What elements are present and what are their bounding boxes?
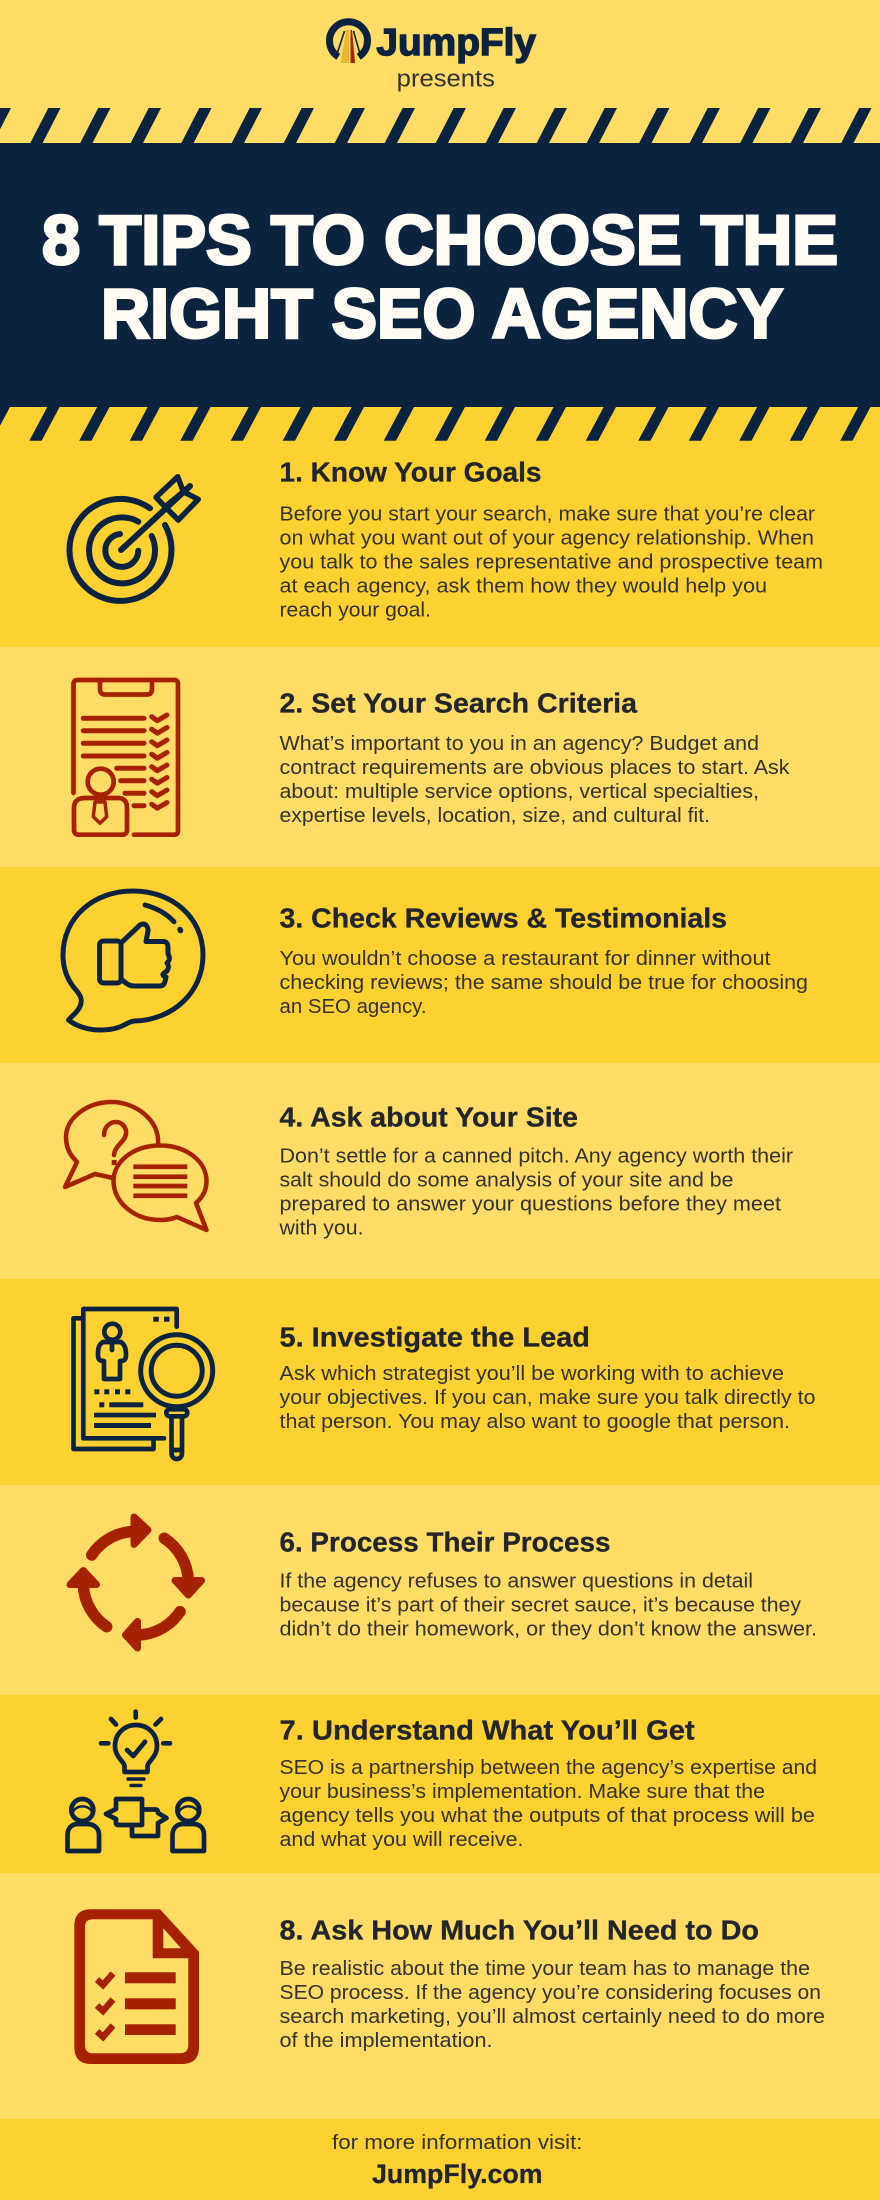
body text: tip 5: that person. You may also want to google that person. [280,1411,790,1433]
body text: tip 8: of the implementation. [280,2030,492,2052]
panel: tip 7 [0,1695,880,1873]
footer website: JumpFly.com [372,2159,543,2189]
panel: tip 8 [0,1873,880,2119]
body text: tip 7 [280,1757,817,1851]
body text: tip 3: an SEO agency. [280,996,426,1018]
lower hazard stripes [0,407,870,441]
body text: tip 7: your business’s implementation. Make sure that the [280,1781,765,1803]
body text: tip 1 [280,504,823,622]
body text: tip 5: your objectives. If you can, make sure you talk directly to [280,1387,816,1409]
body text: tip 6: If the agency refuses to answer questions in detail [280,1570,753,1592]
body text: tip 8: search marketing, you’ll almost certainly need to do more [280,2006,825,2028]
body text: tip 5 [280,1363,816,1433]
body text: tip 3: You wouldn’t choose a restaurant for dinner without [280,948,771,970]
icon: clipboard with person and checklist [74,680,178,835]
title: 8 TIPS TO CHOOSE THE [42,201,838,279]
body text: tip 4: with you. [278,1218,364,1240]
panel: tip 1 [0,407,880,647]
panel: header with logo [0,0,880,143]
heading: tip 6: 6. Process Their Process [280,1526,610,1557]
body text: tip 2: contract requirements are obvious places to start. Ask [280,757,791,779]
body text: tip 3: checking reviews; the same should be true for choosing [280,972,808,994]
icon: lightbulb over two people in conversation [68,1712,204,1851]
body text: tip 8 [280,1958,825,2052]
panel: tip 2 [0,647,880,867]
body text: tip 7: agency tells you what the outputs of that process will be [280,1805,815,1827]
body text: tip 8: SEO process. If the agency you’re considering focuses on [280,1982,821,2004]
body text: tip 4 [278,1146,793,1240]
icon: JumpFly logo mark [330,22,368,63]
heading: tip 4: 4. Ask about Your Site [280,1102,578,1133]
panel: tip 5 [0,1279,880,1485]
body text: tip 6: didn’t do their homework, or they don’t know the answer. [280,1618,817,1640]
body text: tip 7: and what you will receive. [280,1829,524,1851]
body text: tip 3 [280,948,808,1018]
body text: tip 1: at each agency, ask them how they would help you [280,576,767,598]
body text: tip 2: about: multiple service options, vertical specialties, [280,781,759,803]
panel: tip 4 [0,1063,880,1279]
heading: tip 5: 5. Investigate the Lead [280,1322,590,1353]
body text: tip 8: Be realistic about the time your team has to manage the [280,1958,810,1980]
icon: circular process arrows [70,1517,202,1648]
body text: tip 1: reach your goal. [280,600,431,622]
title [42,201,838,353]
logo wordmark: JumpFly [376,22,536,64]
icon: target with arrow [69,477,198,601]
panel: tip 6 [0,1485,880,1695]
title: RIGHT SEO AGENCY [101,275,783,353]
icon: resume document with magnifying glass [74,1309,213,1459]
heading: tip 3: 3. Check Reviews & Testimonials [280,902,727,933]
upper hazard stripes [0,108,871,143]
body text: tip 1: Before you start your search, make sure that you’re clear [280,504,815,526]
panel: footer [0,2119,880,2200]
icon: speech bubble with thumbs up [63,891,203,1030]
body text: tip 2: What’s important to you in an agency? Budget and [280,733,759,755]
body text: tip 6: because it’s part of their secret sauce, it’s because they [280,1594,801,1616]
body text: tip 4: prepared to answer your questions before they meet [280,1194,781,1216]
presents label: presents [397,66,495,93]
panel: tip 3 [0,867,880,1063]
heading: tip 1: 1. Know Your Goals [280,457,542,488]
icon: document with checklist [74,1909,199,2064]
body text: tip 6 [280,1570,817,1640]
body text: tip 2 [280,733,791,827]
heading: tip 8: 8. Ask How Much You’ll Need to Do [280,1914,759,1945]
heading: tip 2: 2. Set Your Search Criteria [280,688,638,719]
body text: tip 1: on what you want out of your agency relationship. When [280,528,814,550]
footer prompt: for more information visit: [332,2132,582,2154]
body text: tip 2: expertise levels, location, size, and cultural fit. [280,805,710,827]
body text: tip 5: Ask which strategist you’ll be working with to achieve [280,1363,784,1385]
body text: tip 7: SEO is a partnership between the agency’s expertise and [280,1757,817,1779]
heading: tip 7: 7. Understand What You’ll Get [280,1714,695,1745]
body text: tip 1: you talk to the sales representative and prospective team [280,552,823,574]
panel: navy title band [0,143,880,407]
body text: tip 4: salt should do some analysis of your site and be [280,1170,734,1192]
body text: tip 4: Don’t settle for a canned pitch. Any agency worth their [280,1146,793,1168]
icon: question and answer speech bubbles [65,1102,206,1230]
